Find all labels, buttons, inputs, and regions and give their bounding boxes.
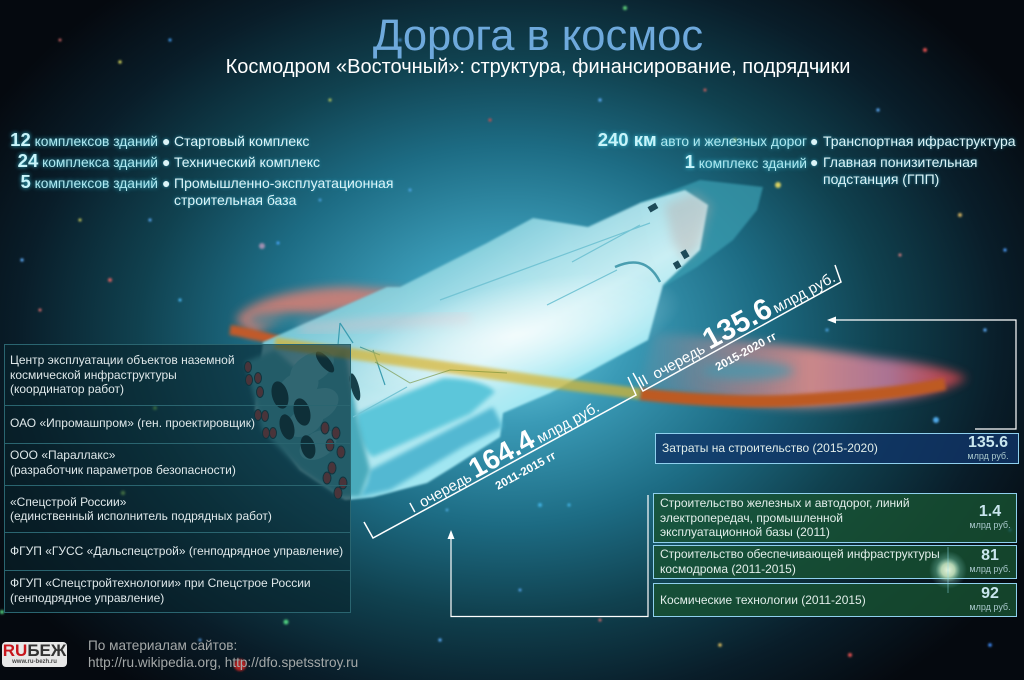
- bracket: first stage line: [364, 377, 636, 538]
- value: 1.4: 1.4: [979, 503, 1001, 520]
- subtitle: Космодром «Восточный»: структура, финансирование, подрядчики: [226, 56, 850, 78]
- label: second stage: 135.6: [697, 292, 778, 356]
- contractor row 5: [4, 532, 351, 571]
- rocket: [244, 180, 763, 500]
- panel: railways and roads: эксплуатационной базы (2011): [660, 525, 830, 539]
- value: 81: [969, 547, 1011, 574]
- item: launch complex: Стартовый комплекс: [174, 133, 309, 149]
- item: launch complex: 12 комплексов зданий: [10, 129, 158, 150]
- value: 81: млрд руб.: [969, 564, 1011, 574]
- right facilities list: [596, 129, 1017, 188]
- contractor row 6: ФГУП «Спецстройтехнологии» при Спецстрое России: [10, 576, 311, 590]
- contractor row 1: космической инфраструктуры: [10, 368, 177, 382]
- bracket: second stage line: [633, 265, 841, 391]
- logo: RUБЕЖ: RUБЕЖ: [3, 641, 66, 660]
- contractor row 5: ФГУП «ГУСС «Дальспецстрой» (генподрядное управление): [10, 544, 343, 558]
- value: 1.4: [969, 503, 1011, 530]
- label: second stage: II: [636, 372, 651, 391]
- source credits: [88, 638, 358, 670]
- bright star: [930, 547, 966, 593]
- label: first stage dates: 2011-2015 гг: [494, 450, 559, 493]
- item: power substation: [684, 151, 979, 188]
- contractor row 3: ООО «Параллакс»: [10, 448, 115, 462]
- panel: space technologies: [653, 583, 1017, 617]
- side booster one: [357, 378, 495, 457]
- panel: railways and roads: Строительство железных и автодорог, линий: [660, 496, 910, 510]
- panel: supporting infrastructure: [653, 545, 1017, 579]
- body panel lines: [338, 223, 660, 417]
- value: 92: млрд руб.: [969, 602, 1011, 612]
- logo: RUБЕЖ: [2, 642, 67, 667]
- item: transport infrastructure: Транспортная ифраструктура: [823, 133, 1016, 149]
- panel: supporting infrastructure: космодрома (2011-2015): [660, 562, 796, 576]
- label: first stage: млрд руб.: [534, 399, 602, 447]
- label: second stage: очередь: [650, 340, 708, 383]
- contractor row 1: (координатор работ): [10, 382, 124, 396]
- item: construction base: строительная база: [174, 192, 296, 208]
- galaxy: right lobe: [640, 333, 967, 407]
- contractor row 1: Центр эксплуатации объектов наземной: [10, 353, 235, 367]
- item: technical complex: ●: [162, 154, 170, 170]
- left facilities list: [9, 129, 394, 209]
- pink-tinted forward section: [665, 192, 712, 262]
- value: 92: [969, 585, 1011, 612]
- rocket nose: [640, 180, 763, 287]
- item: technical complex: [16, 150, 320, 172]
- item: construction base: [18, 171, 394, 209]
- item: construction base: ●: [162, 175, 170, 191]
- item: launch complex: ●: [162, 133, 170, 149]
- item: launch complex: [9, 129, 310, 150]
- rocket engines: [244, 344, 362, 499]
- value: 92: 92: [981, 585, 999, 602]
- contractor row 4: (единственный исполнитель подрядных работ): [10, 509, 272, 523]
- item: power substation: ●: [810, 154, 818, 170]
- panel: construction cost 2015-2020: Затраты на строительство (2015-2020): [662, 441, 878, 455]
- item: technical complex: 24 комплекса зданий: [18, 150, 158, 171]
- label: second stage dates: 2015-2020 гг: [714, 330, 779, 374]
- pink streak on body: [300, 318, 470, 328]
- value: 135.6: [967, 434, 1009, 461]
- side booster two: [360, 407, 503, 497]
- panel: contractors: [4, 344, 351, 613]
- item: power substation: Главная понизительная: [823, 154, 977, 170]
- panel: railways and roads: электропередач, промышленной: [660, 511, 843, 525]
- label: first stage: 164.4: [463, 423, 540, 484]
- value: 135.6: 135.6: [968, 434, 1008, 451]
- contractor row 3: (разработчик параметров безопасности): [10, 462, 236, 476]
- contractor row 6: (генподрядное управление): [10, 590, 164, 604]
- rocket body: [255, 190, 708, 500]
- value: 81: 81: [981, 547, 999, 564]
- item: power substation: подстанция (ГПП): [823, 171, 939, 187]
- item: transport infrastructure: 240 км авто и железных дорог: [598, 129, 807, 150]
- title: Дорога в космос: [373, 12, 703, 60]
- label: first stage: I: [407, 500, 419, 517]
- arrow: first stage: [448, 495, 648, 616]
- contractor row 2: [4, 405, 351, 444]
- source credits: http://ru.wikipedia.org, http://dfo.spetsstroy.ru: [88, 655, 358, 670]
- arrow: second stage: [827, 316, 1016, 429]
- contractor row 6: [4, 570, 351, 613]
- value: 1.4: млрд руб.: [969, 520, 1011, 530]
- logo: RUБЕЖ: www.ru-bezh.ru: [12, 659, 57, 665]
- contractor row 4: «Спецстрой России»: [10, 494, 126, 508]
- panel: supporting infrastructure: Строительство обеспечивающей инфраструктуры: [660, 547, 940, 561]
- nozzle section: [245, 350, 370, 497]
- item: technical complex: Технический комплекс: [174, 154, 320, 170]
- item: transport infrastructure: [596, 129, 1017, 150]
- rocket central glow: [338, 249, 692, 421]
- contractor row 4: [4, 485, 351, 533]
- contractor row 1: [4, 344, 351, 406]
- contractor row 2: ОАО «Ипромашпром» (ген. проектировщик): [10, 416, 255, 430]
- galaxy: left lobe: [230, 287, 410, 352]
- value: 135.6: млрд руб.: [967, 451, 1009, 461]
- item: transport infrastructure: ●: [810, 133, 818, 149]
- label: first stage: очередь: [416, 469, 475, 511]
- label: second stage: млрд руб.: [770, 269, 838, 317]
- galaxy band over rocket: [275, 343, 640, 394]
- item: construction base: Промышленно-эксплуатационная: [174, 175, 393, 191]
- panel: railways and roads: [653, 493, 1017, 543]
- item: construction base: 5 комплексов зданий: [20, 171, 158, 192]
- panel: construction cost 2015-2020: [655, 433, 1019, 464]
- source credits: По материалам сайтов:: [88, 638, 237, 653]
- item: power substation: 1 комплекс зданий: [685, 151, 807, 172]
- contractor row 3: [4, 443, 351, 486]
- panel: space technologies: Космические технологии (2011-2015): [660, 593, 866, 607]
